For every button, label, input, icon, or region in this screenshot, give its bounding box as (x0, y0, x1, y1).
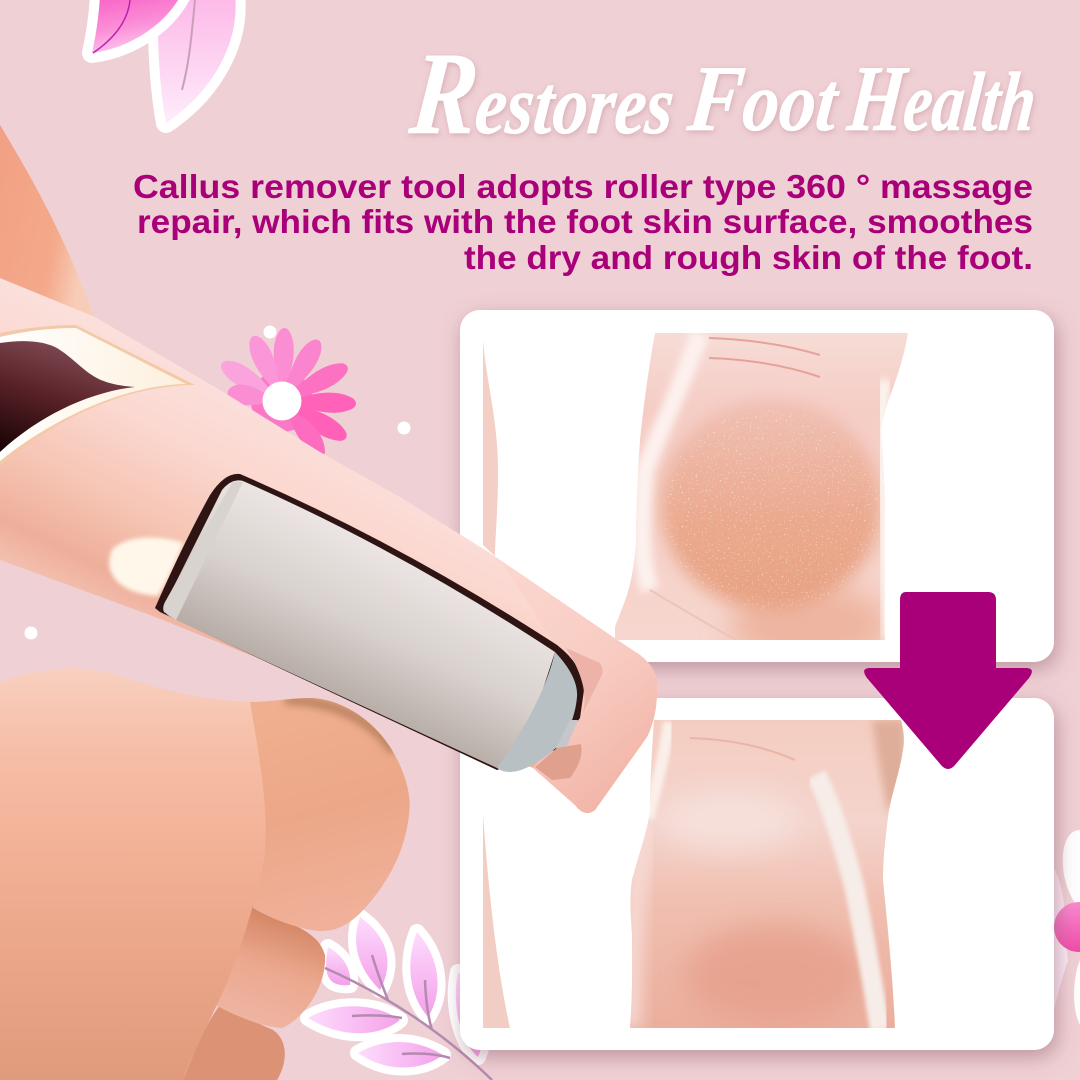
text block: description: the dry and rough skin of the foot. (464, 239, 1033, 276)
icon: right-edge flower (1054, 830, 1080, 1025)
arrow: before to after (864, 592, 1032, 769)
recess wall (566, 648, 603, 713)
decorative dots (24, 326, 410, 640)
thumb tip (240, 698, 410, 931)
roller slot (155, 474, 584, 770)
title: Foot (683, 47, 845, 151)
photo: smooth heel after (483, 720, 910, 1030)
illustration: callus remover device (0, 278, 657, 813)
middle finger (215, 905, 325, 1028)
photo: cracked heel before (483, 333, 908, 640)
title: Restores (404, 28, 682, 159)
title: Health (843, 47, 1042, 151)
title (404, 28, 1042, 159)
text block: description: repair, which fits with the foot skin surface, smoothes (137, 203, 1033, 240)
icon: leaf branch (308, 917, 492, 1080)
icon: top petal decoration (92, 0, 236, 123)
text block: description: Callus remover tool adopts roller type 360 ° massage (133, 168, 1033, 205)
panel: before photo (460, 310, 1054, 665)
roller head (164, 480, 555, 768)
device tip (500, 560, 657, 813)
thumb main (0, 668, 266, 1080)
recess lower (535, 744, 582, 780)
lowest finger (183, 1005, 285, 1080)
icon: pink daisy flower (216, 328, 356, 460)
device body (0, 278, 657, 813)
roller rim (163, 481, 243, 620)
metallic band (0, 325, 195, 466)
upper finger (0, 125, 95, 320)
axle (556, 720, 578, 750)
panel: after photo (460, 698, 1054, 1050)
illustration: hand (0, 125, 410, 1080)
device highlight (109, 538, 183, 596)
text block: description (133, 168, 1033, 276)
roller cap (497, 652, 577, 772)
